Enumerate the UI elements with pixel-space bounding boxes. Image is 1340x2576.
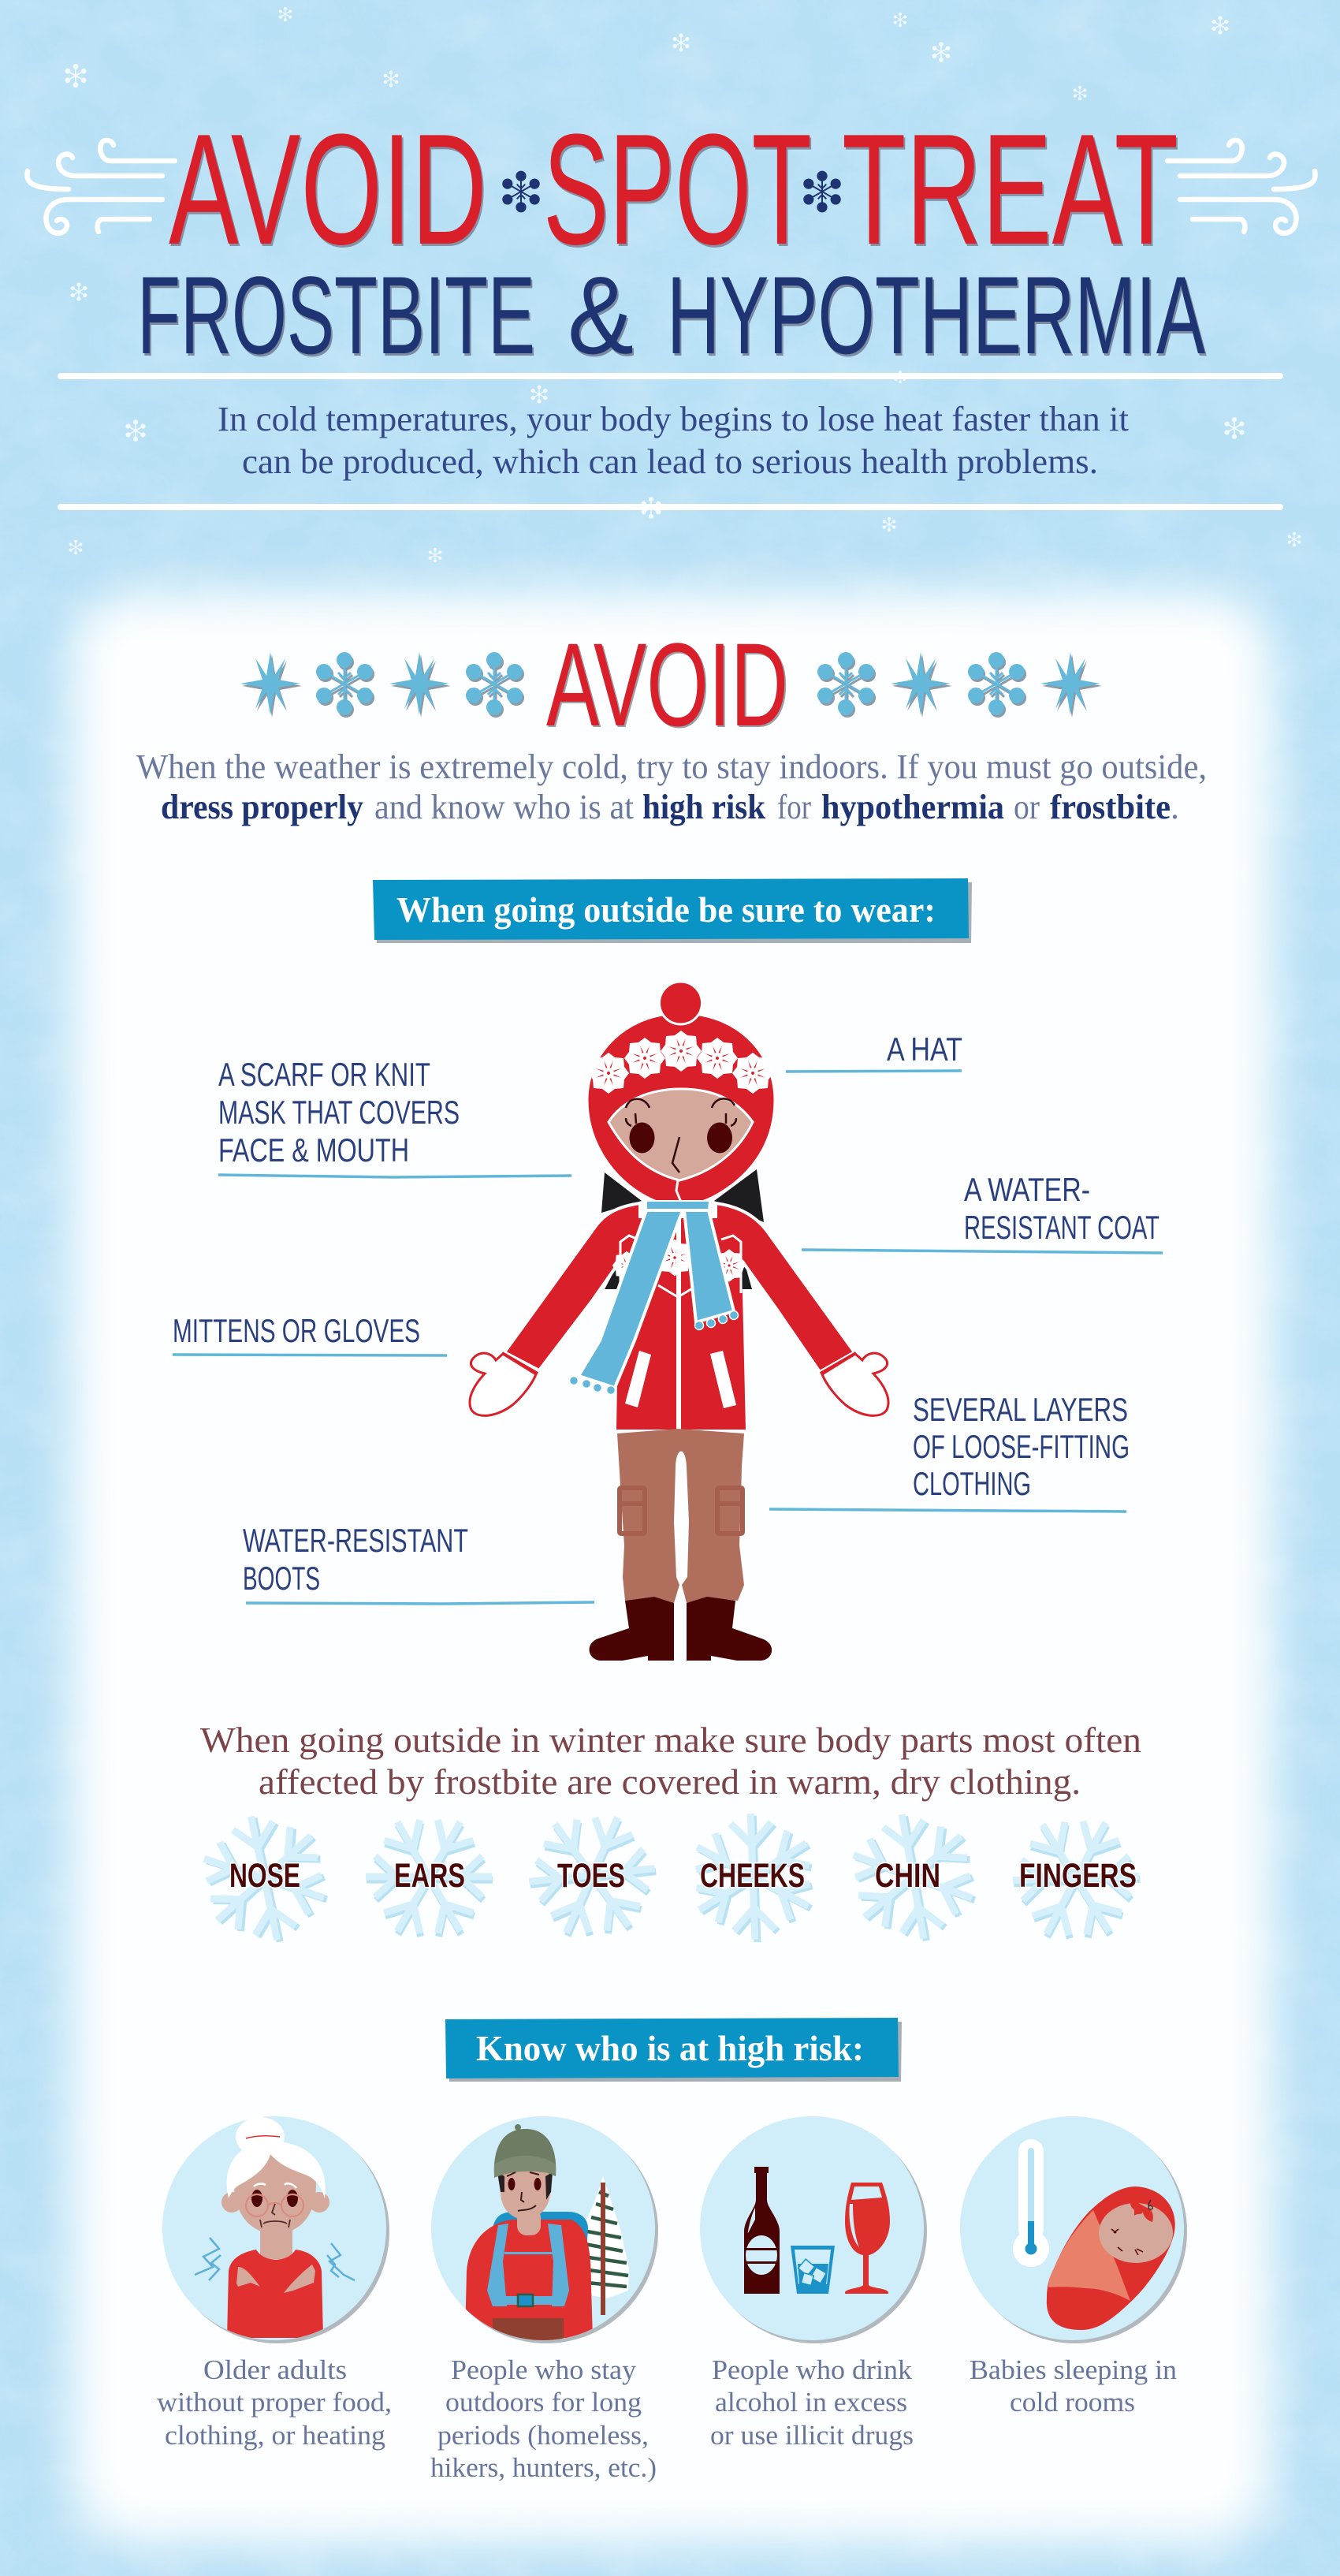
icon: navy snowflake 1 (502, 171, 540, 212)
caption: or use illicit drugs (710, 2420, 914, 2451)
banner: when going outside (373, 878, 972, 943)
coat (504, 1203, 854, 1430)
clothing label: water-resistant boots: WATER-RESISTANT (243, 1522, 468, 1559)
whisky tumbler (791, 2246, 835, 2294)
caption: without proper food, (157, 2387, 392, 2418)
falling snow decoration (65, 7, 1301, 562)
avoid intro paragraph: or (1014, 788, 1040, 826)
icon: wind swirls right (1167, 140, 1316, 233)
clothing label: several layers (769, 1391, 1130, 1512)
caption: Babies sleeping in (970, 2354, 1177, 2385)
clothing label: several layers: OF LOOSE-FITTING (913, 1428, 1130, 1465)
clothing label: a hat: A HAT (887, 1031, 962, 1068)
scarf tassels (569, 1310, 738, 1394)
clothing label: scarf or knit mask: A SCARF OR KNIT (218, 1056, 430, 1093)
thermometer (1013, 2139, 1049, 2267)
avoid intro paragraph: and know who is at (374, 788, 634, 826)
face (609, 1089, 753, 1180)
caption (157, 2354, 392, 2451)
title: avoid spot treat (27, 102, 1316, 278)
clothing label: water-resistant boots (243, 1522, 594, 1604)
clothing label: water-resistant coat (802, 1171, 1163, 1253)
caption (710, 2354, 914, 2451)
banner: know who is at high risk (445, 2018, 902, 2082)
clothing label: water-resistant coat: RESISTANT COAT (964, 1209, 1159, 1246)
avoid intro paragraph: for (777, 788, 811, 826)
caption: People who drink (712, 2354, 913, 2385)
body part: chin: CHIN (875, 1857, 940, 1895)
wine glass (845, 2183, 890, 2294)
circle illustration: grandmother (162, 2116, 389, 2343)
section heading: avoid (240, 618, 1102, 751)
avoid intro paragraph: hypothermia (821, 788, 1004, 826)
banner: when going outside: When going outside be sure to wear: (396, 889, 936, 930)
heading words in red: SPOT (543, 102, 812, 278)
body part: toes: TOES (557, 1857, 625, 1895)
risk group: alcohol and drugs (700, 2116, 927, 2451)
scarf (579, 1201, 734, 1388)
coat trim and zip (612, 1214, 746, 1431)
subtitle: frostbite and hypothermia (137, 253, 1205, 377)
risk group: older adults (157, 2116, 392, 2451)
circle illustration: bottle and glasses (700, 2116, 927, 2343)
bottle (744, 2167, 780, 2294)
circle illustration: thermometer and baby (960, 2116, 1187, 2343)
body part: toes (506, 1791, 679, 1963)
pine tree (586, 2176, 629, 2315)
circle illustration: hiker and tree (431, 2116, 658, 2343)
risk group: people outdoors (430, 2116, 658, 2483)
clothing label: scarf or knit mask: MASK THAT COVERS (218, 1094, 460, 1131)
avoid intro paragraph: high risk (642, 788, 765, 826)
clothing label: water-resistant coat: A WATER- (964, 1171, 1090, 1208)
heading word avoid: AVOID (546, 618, 788, 751)
hat and pompom (587, 982, 775, 1206)
clothing label: several layers: CLOTHING (913, 1465, 1031, 1502)
heading words in red: AVOID (169, 102, 487, 278)
avoid intro paragraph: When the weather is extremely cold, try to stay indoors. If you must go outside, (136, 747, 1207, 786)
trousers (617, 1429, 745, 1603)
body part: cheeks: CHEEKS (700, 1857, 805, 1895)
snowflake row left (240, 652, 524, 718)
figure: girl in winter clothing (470, 982, 888, 1661)
caption: hikers, hunters, etc.) (430, 2452, 657, 2483)
caption (970, 2354, 1177, 2418)
avoid intro paragraph: dress properly (161, 788, 363, 826)
subtitle: frostbite and hypothermia: FROSTBITE (137, 253, 535, 377)
risk group: babies (960, 2116, 1187, 2418)
body part: fingers: FINGERS (1019, 1857, 1137, 1895)
caption: People who stay (451, 2354, 637, 2385)
avoid intro paragraph: frostbite (1050, 788, 1171, 826)
caption (430, 2354, 657, 2483)
avoid intro paragraph: . (1171, 788, 1179, 826)
subtitle: frostbite and hypothermia: & (568, 253, 634, 377)
clothing label: mittens or gloves: MITTENS OR GLOVES (173, 1312, 420, 1349)
boots (590, 1597, 772, 1661)
body parts on snowflakes (188, 1790, 1165, 1967)
heading words in red: TREAT (842, 102, 1178, 278)
intro text (218, 400, 1129, 481)
snowflake row right (817, 652, 1102, 718)
caption: cold rooms (1010, 2387, 1135, 2418)
frostbite paragraph: When going outside in winter make sure body parts most often (200, 1720, 1141, 1760)
caption: periods (homeless, (437, 2420, 649, 2451)
frostbite paragraph (200, 1720, 1141, 1802)
mittens (470, 1353, 888, 1415)
caption: alcohol in excess (715, 2387, 907, 2418)
body part: ears (340, 1790, 519, 1967)
clothing label: scarf or knit mask (218, 1056, 571, 1177)
icon: wind swirls left (27, 140, 175, 233)
intro text: can be produced, which can lead to serious health problems. (242, 442, 1098, 481)
caption: Older adults (203, 2354, 347, 2385)
banner: know who is at high risk: Know who is at high risk: (476, 2028, 864, 2068)
hair (601, 1169, 764, 1289)
heading words in red (169, 102, 1178, 278)
body part: chin (838, 1802, 990, 1952)
body part: nose: NOSE (229, 1857, 300, 1895)
clothing label: water-resistant boots: BOOTS (243, 1560, 320, 1597)
clothing label: scarf or knit mask: FACE & MOUTH (218, 1131, 409, 1169)
intro text: In cold temperatures, your body begins to lose heat faster than it (218, 400, 1129, 438)
frostbite paragraph: affected by frostbite are covered in warm, dry clothing. (259, 1762, 1081, 1802)
body part: fingers (988, 1792, 1165, 1967)
clothing label: several layers: SEVERAL LAYERS (913, 1391, 1128, 1428)
swaddled baby (1047, 2186, 1175, 2330)
body part: cheeks (686, 1811, 822, 1944)
body part: nose (188, 1802, 344, 1955)
avoid intro paragraph (136, 747, 1207, 826)
caption: outdoors for long (445, 2387, 642, 2418)
icon: navy snowflake 2 (803, 171, 841, 212)
caption: clothing, or heating (165, 2420, 385, 2451)
body part: ears: EARS (394, 1857, 465, 1895)
white content panel glow (73, 593, 1272, 2542)
